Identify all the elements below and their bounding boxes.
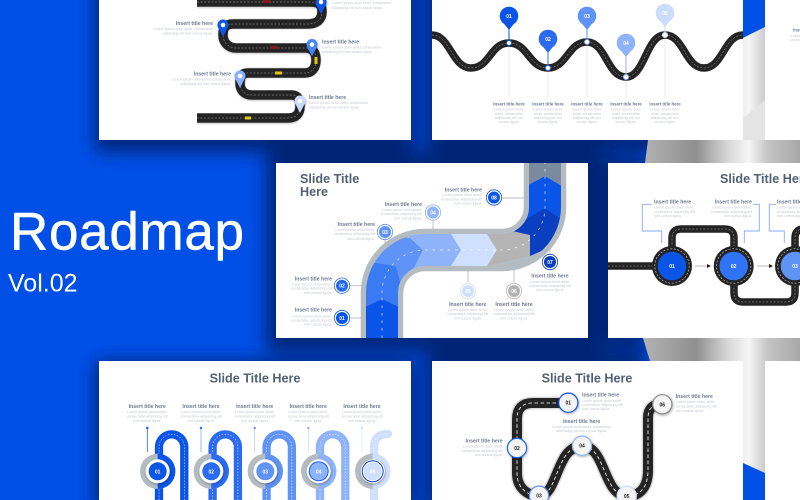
caption 1: consectetur adipiscing elit [654, 210, 695, 214]
panel: sliver slide top right [765, 0, 800, 140]
label 3 [322, 40, 382, 54]
label 02: consectetur adipiscing elit [462, 449, 503, 453]
captions: cursus ligula. [577, 120, 597, 124]
captions: cursus ligula. [616, 120, 636, 124]
marker 07: 07 [547, 260, 553, 266]
slide title: Slide Title [300, 172, 359, 186]
column 05: non cursus ligula. [348, 419, 376, 423]
marker 03 [377, 224, 393, 240]
label 4: adipiscing elit non cursus ligula. [180, 82, 231, 86]
pin 05: 05 [662, 11, 668, 17]
column 01: consectetur adipiscing elit [127, 414, 168, 418]
marker 06: 06 [511, 289, 517, 295]
column 04: Lorem ipsum dolor amet, [288, 410, 328, 414]
text 05: consectetur adipiscing elit [447, 312, 488, 316]
title: Roadmap: Roadmap [10, 202, 244, 262]
text 06 [493, 302, 535, 320]
column 05: Insert title here [343, 404, 381, 410]
map pin 4 [234, 70, 246, 88]
captions: amet, consectetur [534, 112, 563, 116]
column 04: consectetur adipiscing elit [288, 414, 329, 418]
captions: Lorem ipsum dolor [494, 108, 525, 112]
label 5: Lorem ipsum dolor amet, consectetur [309, 101, 369, 105]
text 03: Insert title here [338, 222, 375, 228]
text 04 [381, 202, 422, 220]
marker 01 [334, 310, 350, 326]
column 03: non cursus ligula. [241, 419, 269, 423]
road [197, 2, 322, 119]
captions: Insert title here [649, 102, 681, 106]
text 02: non cursus ligula. [304, 291, 332, 295]
node 05: 05 [624, 494, 630, 500]
label 04 [552, 419, 612, 433]
column 03: Lorem ipsum dolor amet, [235, 410, 275, 414]
pin 01: 01 [506, 14, 512, 20]
text 02 [291, 276, 332, 295]
node 05 [617, 486, 636, 500]
node 06: 06 [660, 402, 665, 408]
column 03: consectetur adipiscing elit [234, 414, 275, 418]
text 07: non cursus ligula. [536, 288, 564, 292]
text 04: Lorem ipsum dolor amet, [382, 208, 422, 212]
captions: Insert title here [532, 102, 564, 106]
column 05: 05 [370, 469, 376, 475]
caption 1 [654, 199, 695, 218]
column 03: 03 [263, 469, 268, 475]
panel: winding road slide [99, 0, 411, 140]
marker 08 [486, 190, 502, 205]
road centre dashes [382, 163, 545, 338]
marker 07 [542, 254, 558, 270]
node 03 [775, 246, 800, 286]
label top [332, 1, 392, 10]
pin 02 [539, 30, 557, 71]
text 05: Insert title here [449, 302, 486, 308]
node 01 [652, 246, 692, 286]
marker 05 [460, 283, 476, 299]
node 01 [559, 393, 578, 412]
node 04 [572, 436, 592, 455]
pin 03: 03 [584, 14, 590, 20]
label top: adipiscing elit non cursus ligula. [332, 6, 383, 10]
text 05 [447, 302, 488, 320]
text 08: Insert title here [445, 187, 482, 193]
label 4: Insert title here [194, 72, 231, 78]
captions: Insert title here [493, 102, 525, 106]
captions: Lorem ipsum dolor [611, 108, 642, 112]
label 01: non cursus ligula. [582, 407, 610, 411]
label 4: Lorem ipsum dolor amet, consectetur [172, 78, 232, 82]
text 04: non cursus ligula. [394, 216, 422, 220]
label 02: non cursus ligula. [475, 453, 503, 457]
label 01: Insert title here [582, 393, 619, 399]
caption 2: non cursus ligula. [724, 214, 752, 218]
captions [493, 102, 681, 124]
label 3: Lorem ipsum dolor amet, consectetur [322, 46, 382, 50]
marker 03: 03 [382, 230, 388, 236]
marker 05: 05 [465, 289, 471, 295]
text 06: Lorem ipsum dolor amet, [494, 308, 534, 312]
caption 2: Lorem ipsum dolor amet, [712, 206, 752, 210]
label 3: Insert title here [322, 40, 359, 46]
label 02: Insert title here [465, 439, 503, 445]
pin 03 [578, 7, 596, 45]
text 05: non cursus ligula. [454, 316, 482, 320]
arrow 1 [695, 264, 711, 268]
node 02: 02 [514, 446, 520, 452]
column 02: non cursus ligula. [187, 419, 215, 423]
column 01: non cursus ligula. [133, 419, 161, 423]
text 08: consectetur adipiscing elit [441, 198, 482, 202]
marker 02 [334, 278, 350, 293]
caption 1: Insert title here [654, 199, 691, 205]
text 01 [291, 308, 332, 326]
panel: s-curve road slide [432, 361, 743, 500]
captions: Lorem ipsum dolor [533, 108, 564, 112]
road [517, 403, 662, 496]
captions: Insert title here [571, 102, 603, 106]
label 06: Insert title here [676, 394, 713, 400]
column 03 [234, 404, 292, 500]
label 06: non cursus ligula. [676, 409, 704, 413]
node 04: 04 [579, 444, 585, 450]
column 04: Insert title here [290, 404, 327, 410]
text 03: consectetur adipiscing elit [334, 232, 375, 236]
text 07: Lorem ipsum dolor amet, [530, 280, 570, 284]
connecting road [608, 229, 800, 302]
label 04: Insert title here [563, 419, 600, 425]
text 03 [334, 222, 375, 241]
pin 04: 04 [623, 41, 629, 47]
node 03: 03 [792, 264, 798, 270]
captions: amet, consectetur [573, 112, 602, 116]
text 07 [529, 274, 571, 292]
marker 08: 08 [491, 196, 497, 202]
captions: Lorem ipsum dolor [650, 108, 681, 112]
silver shard overlay [645, 140, 800, 163]
label 4 [172, 72, 232, 86]
label 06: Lorem ipsum dolor amet, [676, 400, 715, 404]
connector lines [350, 198, 550, 318]
text 02: consectetur adipiscing elit [291, 286, 332, 290]
captions: amet, consectetur [495, 112, 524, 116]
captions: adipiscing elit non [534, 116, 562, 120]
column 05: consectetur adipiscing elit [341, 414, 383, 418]
label 2 [154, 21, 214, 36]
node 03: 03 [536, 494, 542, 500]
map pin 5 [294, 96, 306, 113]
text 08: non cursus ligula. [454, 202, 482, 206]
marker 06 [506, 283, 522, 299]
node 03 [529, 486, 549, 500]
label 2: Lorem ipsum dolor amet, consectetur [154, 27, 214, 31]
captions: amet, consectetur [651, 112, 680, 116]
map pin 1 [316, 0, 326, 14]
caption 2: Insert title here [715, 199, 752, 205]
marker 02: 02 [339, 284, 345, 290]
label 5: Insert title here [309, 95, 346, 101]
subtitle: Vol.02: Vol.02 [8, 270, 78, 298]
silver diagonal shard [643, 10, 800, 475]
panel: chevron road slide [276, 160, 588, 340]
column 02: Insert title here [182, 404, 220, 410]
guide lines [509, 35, 665, 97]
column 01: Lorem ipsum dolor amet, [127, 410, 167, 414]
label 06 [676, 394, 717, 413]
cars [245, 0, 318, 120]
arrow 2 [757, 264, 773, 268]
label 5: adipiscing elit non cursus ligula. [309, 106, 360, 110]
node 01: 01 [566, 401, 571, 407]
caption 2 [711, 199, 752, 218]
label 01: consectetur adipiscing elit [582, 403, 623, 407]
column 01: 01 [155, 469, 161, 475]
caption 2: consectetur adipiscing elit [711, 210, 752, 214]
text 03: non cursus ligula. [347, 237, 375, 241]
map pin 2 [218, 20, 228, 37]
caption 1: Lorem ipsum dolor amet, [654, 206, 694, 210]
text 04: consectetur adipiscing elit [381, 212, 422, 216]
column 02 [180, 404, 238, 500]
node 01: 01 [669, 264, 675, 270]
captions: Insert title here [610, 102, 642, 106]
label 04: Lorem ipsum dolor amet, consectetur [552, 425, 612, 429]
caption 1: non cursus ligula. [654, 214, 682, 218]
slide title: Slide Title Here [542, 371, 632, 385]
text 07: Insert title here [531, 274, 569, 280]
pin 02: 02 [545, 37, 551, 43]
pin 01 [500, 7, 518, 46]
panel: wave road slide [432, 0, 743, 140]
text 06: consectetur adipiscing elit [493, 312, 535, 316]
label 06: consectetur adipiscing elit [676, 404, 717, 408]
caption 3 [777, 199, 800, 218]
text 01: Insert title here [295, 308, 332, 314]
text 01: consectetur adipiscing elit [291, 318, 332, 322]
node 02 [714, 246, 754, 286]
marker 04 [425, 205, 441, 220]
column 02: consectetur adipiscing elit [180, 414, 222, 418]
column 02: 02 [209, 469, 214, 475]
marker 01: 01 [339, 316, 345, 322]
column 02: Lorem ipsum dolor amet, [181, 410, 221, 414]
text 01: Lorem ipsum dolor amet, [292, 314, 332, 318]
label 04: adipiscing elit non cursus ligula. [556, 429, 607, 433]
column 05: Lorem ipsum dolor amet, [342, 410, 382, 414]
column 04 [288, 404, 345, 500]
captions: adipiscing elit non [495, 116, 523, 120]
marker 04: 04 [430, 210, 436, 216]
node 06 [653, 395, 672, 414]
column 03: Insert title here [236, 404, 273, 410]
label 2: adipiscing elit non cursus ligula. [162, 32, 213, 36]
panel: sliver slide bottom right [765, 361, 800, 500]
chevron segments [355, 160, 562, 340]
pin 05 [656, 4, 674, 38]
label top: Lorem ipsum dolor amet, consectetur [332, 1, 392, 5]
text 03: Lorem ipsum dolor amet, [335, 228, 375, 232]
label 01: Lorem ipsum dolor amet, [582, 399, 622, 403]
column 04: non cursus ligula. [294, 419, 322, 423]
panel: circle road slide [608, 163, 800, 338]
text 08: Lorem ipsum dolor amet, [442, 193, 482, 197]
text 06: non cursus ligula. [500, 316, 528, 320]
label 02 [462, 439, 503, 457]
text 02: Insert title here [295, 276, 332, 282]
map pin 3 [306, 39, 318, 56]
text 02: Lorem ipsum dolor amet, [292, 282, 332, 286]
text 08 [441, 187, 482, 206]
text 05: Lorem ipsum dolor amet, [448, 308, 488, 312]
node 02 [507, 438, 527, 458]
text 06: Insert title here [495, 302, 533, 308]
captions: amet, consectetur [612, 112, 641, 116]
captions: cursus ligula. [538, 120, 558, 124]
pin 04 [617, 34, 635, 80]
captions: cursus ligula. [499, 120, 519, 124]
captions: Lorem ipsum dolor [572, 108, 603, 112]
label 01 [582, 393, 623, 411]
column 05 [341, 404, 390, 500]
label 3: adipiscing elit non cursus ligula. [322, 50, 373, 54]
panel: arch road slide [99, 361, 411, 500]
column 04: 04 [316, 469, 322, 475]
column 01: Insert title here [129, 404, 166, 410]
text 04: Insert title here [385, 202, 422, 208]
node 02: 02 [731, 264, 737, 270]
slide title: Here [300, 185, 328, 199]
captions: cursus ligula. [655, 120, 675, 124]
captions: adipiscing elit non [651, 116, 679, 120]
grey road band [382, 163, 545, 338]
slide drop shadows [95, 0, 666, 500]
captions: adipiscing elit non [573, 116, 601, 120]
slide title [300, 172, 359, 199]
wave road [432, 35, 743, 77]
text 01: non cursus ligula. [304, 322, 332, 326]
label 5 [309, 95, 369, 110]
captions: adipiscing elit non [612, 116, 640, 120]
label 2: Insert title here [176, 21, 213, 27]
callout brackets [642, 204, 784, 243]
text 07: consectetur adipiscing elit [529, 284, 571, 288]
slide title: Slide Title Here [210, 371, 300, 385]
label 02: Lorem ipsum dolor amet, [463, 444, 503, 448]
column 01 [127, 404, 184, 500]
